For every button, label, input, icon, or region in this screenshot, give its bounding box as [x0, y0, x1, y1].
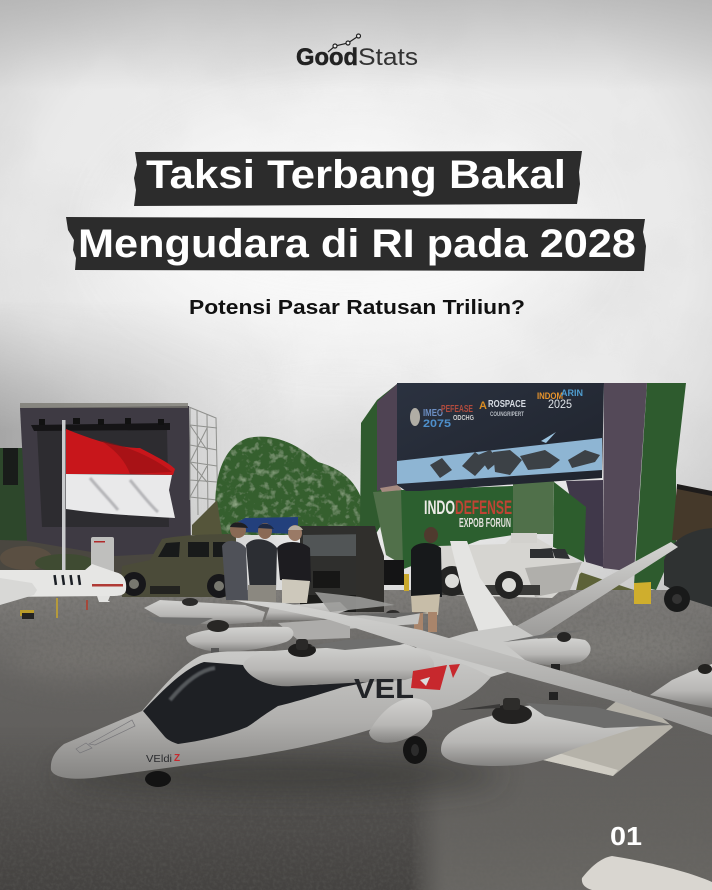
billboard screen	[397, 383, 604, 491]
small logo on nose: Z	[174, 753, 180, 764]
billboard text: Indo Defense: INDO	[424, 498, 455, 519]
logo: GoodStats	[296, 34, 418, 71]
V-tail boom	[513, 542, 678, 640]
billboard screen: ARIN	[561, 388, 583, 399]
billboard text: Indo Defense: EXPOB FORUN	[459, 515, 511, 530]
left SUV partial	[356, 527, 404, 612]
logo: GoodStats: Stats	[358, 44, 418, 71]
front wheel	[145, 771, 171, 787]
background: smoky sky	[0, 0, 712, 620]
fuselage	[51, 650, 491, 779]
small logo on nose	[146, 753, 180, 765]
man in black shirt	[411, 527, 442, 632]
title line 1: Taksi Terbang Bakal	[146, 153, 566, 197]
logo: GoodStats: Good	[296, 44, 358, 71]
billboard screen: COUNGRIPERT	[490, 412, 524, 418]
billboard screen: 2025	[548, 397, 572, 411]
main wing	[232, 600, 712, 735]
subtitle: Potensi Pasar Ratusan Triliun?	[189, 297, 525, 319]
olive military jeep	[121, 534, 236, 598]
billboard text: Indo Defense	[424, 498, 512, 530]
front nacelle	[243, 637, 434, 686]
dark vehicle right	[664, 528, 712, 612]
billboard screen: INDOM	[537, 391, 563, 402]
right building	[360, 383, 712, 598]
left stage building	[0, 403, 205, 590]
billboard screen: ROSPACE	[488, 399, 526, 410]
yellow container	[634, 582, 651, 604]
title line 2: Mengudara di RI pada 2028	[78, 222, 636, 266]
billboard screen: PEFEASE	[441, 404, 473, 415]
bottom right white part	[582, 856, 712, 890]
billboard text: Indo Defense: DEFENSE	[455, 498, 512, 519]
far rear pods and blades	[144, 592, 428, 640]
three men	[222, 522, 311, 603]
billboard screen: 2075	[423, 418, 451, 430]
lower right nacelle	[441, 698, 672, 766]
small logo on nose: VEldi	[146, 754, 172, 765]
blue sign	[232, 517, 298, 534]
trees	[192, 437, 362, 535]
VELO logo on fuselage: VEL	[354, 673, 414, 704]
dark SUV	[300, 526, 384, 612]
billboard screen: ODCHG	[453, 415, 474, 422]
armored white vehicle	[437, 533, 582, 599]
concrete curb	[543, 690, 673, 776]
rear right pod	[503, 630, 591, 700]
yellow bollard	[404, 574, 409, 591]
scaffolding	[189, 407, 218, 520]
title line 1	[134, 151, 582, 206]
billboard screen: IMEO	[423, 408, 443, 419]
VELO logo on fuselage	[354, 664, 460, 704]
tail fin	[450, 541, 515, 635]
landing gear nacelle	[369, 698, 432, 764]
tail root	[408, 625, 540, 677]
flag and pole	[62, 420, 175, 571]
left white drone	[0, 537, 126, 619]
far right pod	[650, 664, 712, 708]
cockpit canopy	[143, 662, 408, 744]
far right rotor hub	[698, 664, 712, 674]
ground	[0, 590, 712, 890]
second nacelle	[186, 620, 293, 664]
windshield panel lines	[76, 720, 135, 753]
billboard screen: A	[479, 400, 487, 412]
page number: 01	[610, 821, 642, 851]
